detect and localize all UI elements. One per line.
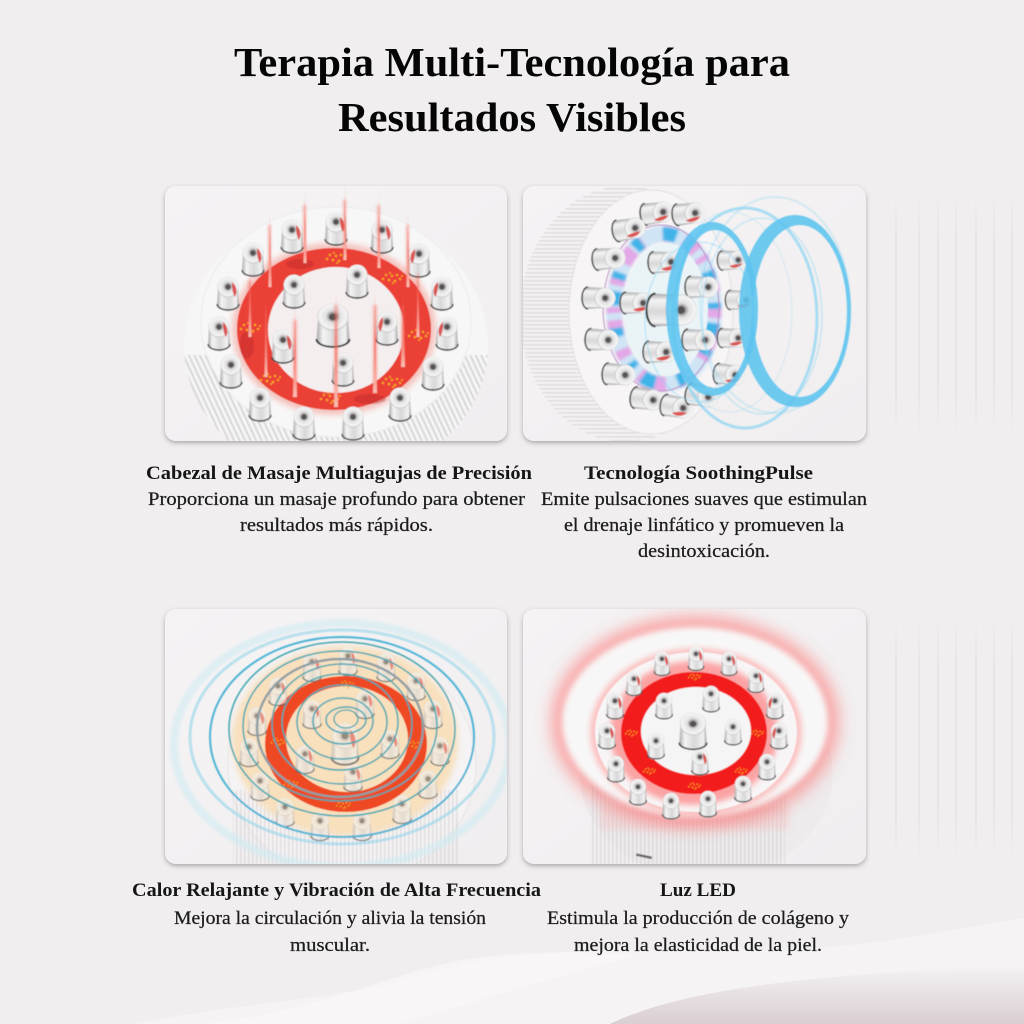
title (234, 39, 790, 140)
LED ring (621, 672, 767, 794)
panel: SoothingPulse technology (520, 186, 866, 442)
caption: multi-needle head: Cabezal de Masaje Multiagujas de Precisión (146, 463, 532, 484)
caption: SoothingPulse: el drenaje linfático y promueven la (564, 516, 844, 536)
caption: heat and vibration (132, 880, 542, 956)
caption: LED light: mejora la elasticidad de la piel. (574, 936, 822, 956)
caption: LED light (547, 880, 850, 956)
red LED ring (237, 248, 431, 410)
caption: SoothingPulse (541, 463, 867, 562)
inner needles (647, 686, 742, 776)
red light beams (248, 200, 419, 407)
panel: LED light (523, 609, 866, 880)
inner needles (272, 264, 398, 387)
background (610, 230, 1024, 1024)
title: Resultados Visibles (338, 94, 686, 140)
caption: LED light: Estimula la producción de colágeno y (547, 909, 850, 929)
caption: heat and vibration: Calor Relajante y Vibración de Alta Frecuencia (132, 880, 542, 901)
panel: soothing heat and vibration (165, 609, 510, 880)
outer needles (208, 212, 458, 441)
caption: LED light: Luz LED (660, 880, 736, 901)
caption: SoothingPulse: Tecnología SoothingPulse (584, 463, 813, 484)
panel: multi-needle massage head (162, 186, 510, 446)
red halo (551, 616, 839, 828)
title: Terapia Multi-Tecnología para (234, 39, 790, 85)
pulse LED ring (614, 234, 714, 384)
caption: SoothingPulse: desintoxicación. (638, 542, 770, 562)
device marking (636, 853, 652, 859)
heat ring (265, 676, 427, 812)
translucent needles (240, 647, 449, 841)
outer needles (598, 646, 788, 820)
faint pulse waves (645, 197, 850, 428)
caption: multi-needle head: Proporciona un masaje profundo para obtener (148, 490, 525, 510)
vibration waves (174, 623, 510, 867)
caption: multi-needle head (146, 463, 532, 536)
caption: multi-needle head: resultados más rápidos. (240, 516, 433, 536)
blue pulse rings (666, 222, 758, 396)
caption: heat and vibration: muscular. (290, 936, 370, 956)
caption: heat and vibration: Mejora la circulación y alivia la tensión (174, 909, 486, 929)
side needles (581, 200, 755, 421)
caption: SoothingPulse: Emite pulsaciones suaves que estimulan (541, 490, 867, 510)
inner white disc (590, 648, 802, 816)
